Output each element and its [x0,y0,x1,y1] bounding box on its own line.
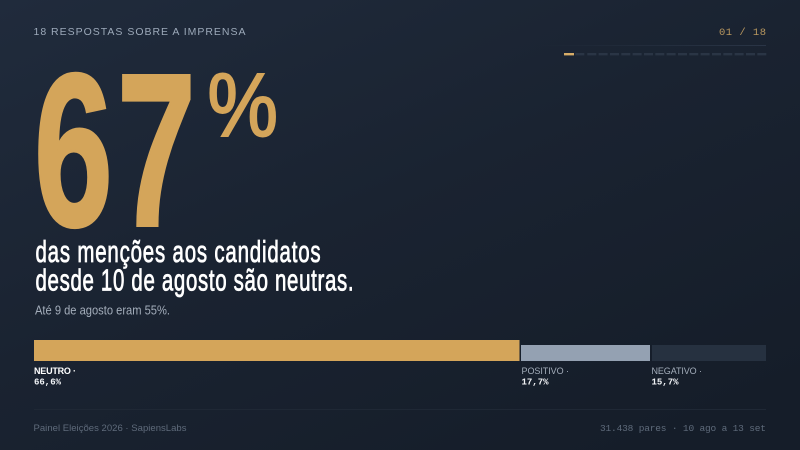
legend: neutro: NEUTRO · [34,366,76,376]
big number [34,29,196,272]
header label: 18 RESPOSTAS SOBRE A IMPRENSA [34,26,246,38]
big number: 6 [34,29,113,272]
footer sample: 31.438 pares · 10 ago a 13 set [600,423,766,434]
headline: desde 10 de agosto são neutras. [36,262,354,298]
progress indicator [564,53,766,55]
legend: positivo: 17,7% [522,378,549,388]
legend: negativo [652,366,702,388]
page counter: 01 / 18 [719,27,766,39]
legend: neutro: 66,6% [34,378,62,388]
legend: negativo: 15,7% [652,378,679,388]
legend: positivo: POSITIVO · [522,366,569,376]
legend: neutro [34,366,76,388]
footer source: Painel Eleições 2026 · SapiensLabs [34,423,187,434]
headline [36,234,354,298]
stacked bar [34,340,766,361]
headline: das menções aos candidatos [36,234,321,269]
legend: negativo: NEGATIVO · [652,366,702,376]
big number: 7 [117,29,196,272]
legend: positivo [522,366,569,388]
percent sign: % [208,54,278,155]
subheading: Até 9 de agosto eram 55%. [35,302,170,318]
